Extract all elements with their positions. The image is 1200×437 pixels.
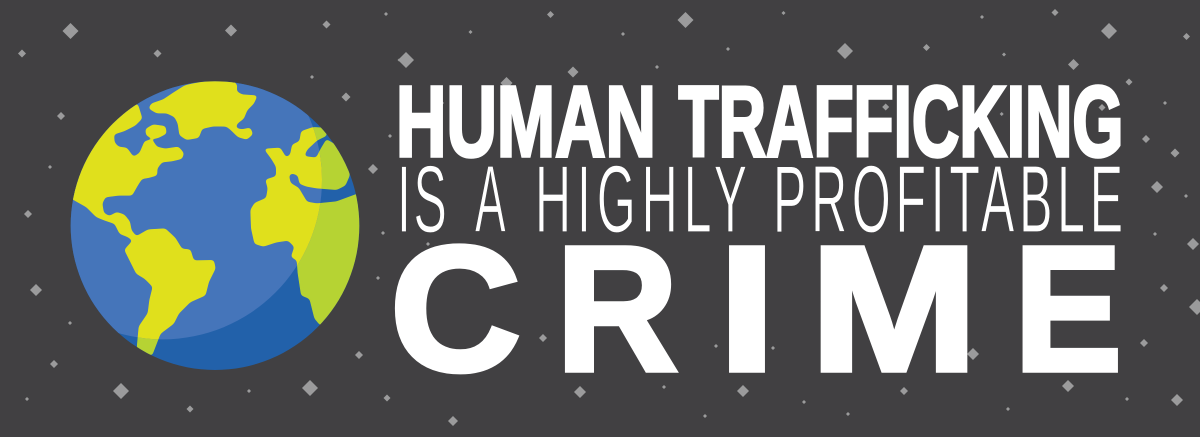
- title word: crime: E: [1014, 209, 1122, 408]
- title word: crime: [390, 209, 1122, 408]
- title line: is a highly profitable: HIGHLY: [535, 147, 753, 253]
- title word: crime: I: [718, 209, 776, 408]
- title line: is a highly profitable: PROFITABLE: [773, 147, 1128, 253]
- title line: is a highly profitable: A: [475, 145, 506, 252]
- title word: crime: M: [810, 209, 978, 408]
- title line: human trafficking: [396, 66, 1124, 178]
- lit side of globe: [70, 81, 322, 340]
- icon: earth globe: [63, 73, 367, 377]
- title line: human trafficking: HUMAN: [396, 66, 656, 178]
- continents in shadow: [70, 81, 365, 355]
- globe ocean in shadow: [63, 73, 367, 377]
- title word: crime: R: [556, 209, 678, 408]
- title line: is a highly profitable: [397, 145, 1128, 253]
- title word: crime: C: [390, 209, 521, 408]
- title line: is a highly profitable: IS: [397, 147, 449, 253]
